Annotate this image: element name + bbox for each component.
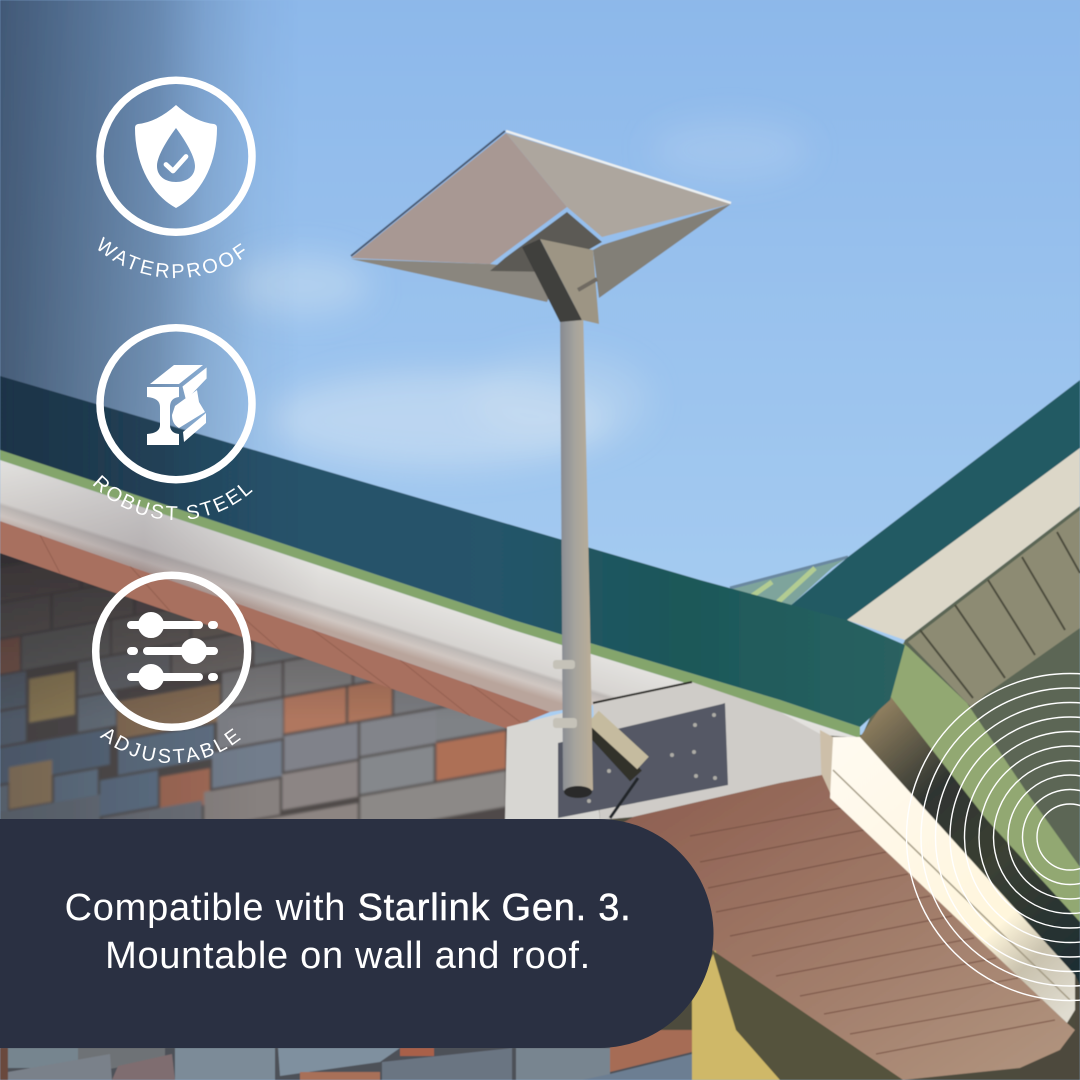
label: robust steel: ROBUST STEEL xyxy=(92,475,253,520)
clouds xyxy=(230,120,810,468)
badge: robust steel xyxy=(92,324,256,520)
main roof xyxy=(0,376,905,727)
dark mounting bracket xyxy=(490,212,602,272)
main roof soffit xyxy=(0,521,550,729)
crack in fascia xyxy=(593,682,692,703)
dish lower right face xyxy=(593,204,731,298)
lower soffit xyxy=(610,775,1075,1080)
pole base opening xyxy=(564,786,592,798)
dark gutter band xyxy=(860,690,1080,985)
soffit plank lines xyxy=(690,808,1055,1054)
badge ring xyxy=(100,328,252,480)
main white fascia xyxy=(0,460,860,817)
right white fascia xyxy=(847,448,1080,640)
fascia shade xyxy=(0,460,320,632)
bracket side plate xyxy=(522,239,582,322)
corner below gutter xyxy=(1020,975,1080,1080)
sky xyxy=(0,0,1080,760)
shaded base behind lower building xyxy=(0,700,1080,1080)
black cable xyxy=(610,778,638,818)
dish upper right face xyxy=(506,133,731,237)
plate bolts xyxy=(587,713,717,803)
sunlit white gutter xyxy=(830,737,1075,1023)
label: adjustable: ADJUSTABLE xyxy=(100,728,241,763)
icon: shield with water drop xyxy=(135,105,217,208)
white mounting block xyxy=(505,706,600,820)
yellow wall xyxy=(692,950,780,1080)
soffit ribs xyxy=(920,532,1080,698)
dish lower left face xyxy=(351,259,560,302)
right beige soffit xyxy=(908,510,1080,708)
stone strip below panel xyxy=(0,1030,692,1080)
concentric rings decoration xyxy=(906,674,1080,1000)
callout text xyxy=(65,887,631,977)
pole clamps xyxy=(553,660,577,728)
shaded wall right xyxy=(860,506,1080,1000)
pole mast xyxy=(560,305,593,796)
badge: adjustable xyxy=(92,572,252,763)
checker plate xyxy=(558,703,728,818)
brick wall xyxy=(0,552,507,819)
conduit elbow xyxy=(593,717,643,763)
conduit shadow xyxy=(592,728,636,776)
far green roof xyxy=(730,557,848,606)
light green roof edge xyxy=(0,450,860,738)
icon: steel I-beam xyxy=(147,365,207,445)
badge: waterproof xyxy=(96,76,256,278)
dish lit rim xyxy=(506,131,731,203)
dish: Starlink panel xyxy=(351,131,731,324)
dish dark rim xyxy=(351,131,505,256)
right green roof xyxy=(790,380,1080,622)
badge ring xyxy=(96,575,248,727)
dark overlay over sky and roof xyxy=(0,0,254,514)
gutter seam xyxy=(833,770,1070,1000)
white fascia below crack xyxy=(593,682,822,820)
label: waterproof: WATERPROOF xyxy=(98,236,245,278)
badge ring xyxy=(100,80,252,232)
icon: sliders xyxy=(131,616,214,686)
dark olive wall band xyxy=(712,950,903,1080)
bolt xyxy=(578,279,597,290)
callout text: Compatible with Starlink Gen. 3. xyxy=(65,887,631,929)
callout panel xyxy=(0,819,714,1048)
dish left face xyxy=(351,133,567,264)
callout text: Mountable on wall and roof. xyxy=(105,935,591,977)
green gutter xyxy=(890,643,1080,922)
bracket triangular plate xyxy=(540,239,599,324)
fascia end cap xyxy=(820,730,833,797)
soffit boards xyxy=(40,535,520,722)
